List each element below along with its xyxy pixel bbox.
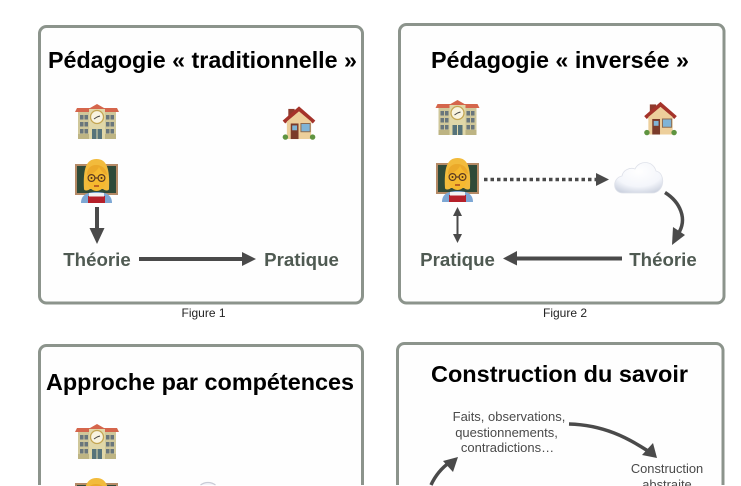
- icon: teacher: [75, 478, 118, 486]
- icon: house: [644, 104, 677, 135]
- heading: Pédagogie inversée: Pédagogie « inversée »: [431, 47, 689, 73]
- panel: Approche par compétences: [40, 346, 362, 486]
- icon: school: [75, 424, 119, 459]
- arrow: theory to practice: [503, 251, 622, 266]
- arrow: cloud to theory: [665, 192, 685, 245]
- heading: Approche par compétences: Approche par compétences: [46, 369, 354, 395]
- panel: Construction du savoir: [398, 344, 723, 485]
- icon: school: [436, 100, 480, 135]
- arrow: teacher and practice: [453, 207, 462, 243]
- label: Pratique: Pratique: [264, 249, 339, 270]
- icon: teacher: [75, 159, 118, 203]
- caption: Figure 2: Figure 2: [543, 306, 587, 320]
- arrow: teacher to theory: [90, 207, 104, 244]
- icon: cloud: [615, 162, 663, 193]
- arrow: theory to practice: [139, 252, 256, 266]
- text: faits, observations: contradictions…: [461, 440, 554, 455]
- label: Théorie: Théorie: [629, 249, 697, 270]
- icon: house: [283, 109, 315, 140]
- panel: Pédagogie traditionnelle: [40, 26, 362, 303]
- arrow: dotted teacher to cloud: [484, 173, 609, 186]
- label: Théorie: Théorie: [63, 249, 131, 270]
- heading: Pédagogie traditionnelle: Pédagogie « traditionnelle »: [48, 47, 357, 73]
- arrow: returning to facts: [431, 457, 458, 485]
- text: faits, observations: [453, 409, 565, 455]
- icon: school: [75, 104, 119, 139]
- arrow: facts to abstract construction: [569, 424, 657, 458]
- icon: teacher: [436, 158, 479, 202]
- heading: Construction du savoir: Construction du savoir: [431, 361, 688, 387]
- icon: circle: [200, 482, 216, 485]
- text: faits, observations: Faits, observations,: [453, 409, 565, 424]
- caption: Figure 1: Figure 1: [181, 306, 226, 320]
- panel: Pédagogie inversée: [400, 24, 724, 303]
- text: faits, observations: questionnements,: [455, 425, 558, 440]
- text: construction: Construction: [631, 461, 703, 476]
- label: Pratique: Pratique: [420, 249, 495, 270]
